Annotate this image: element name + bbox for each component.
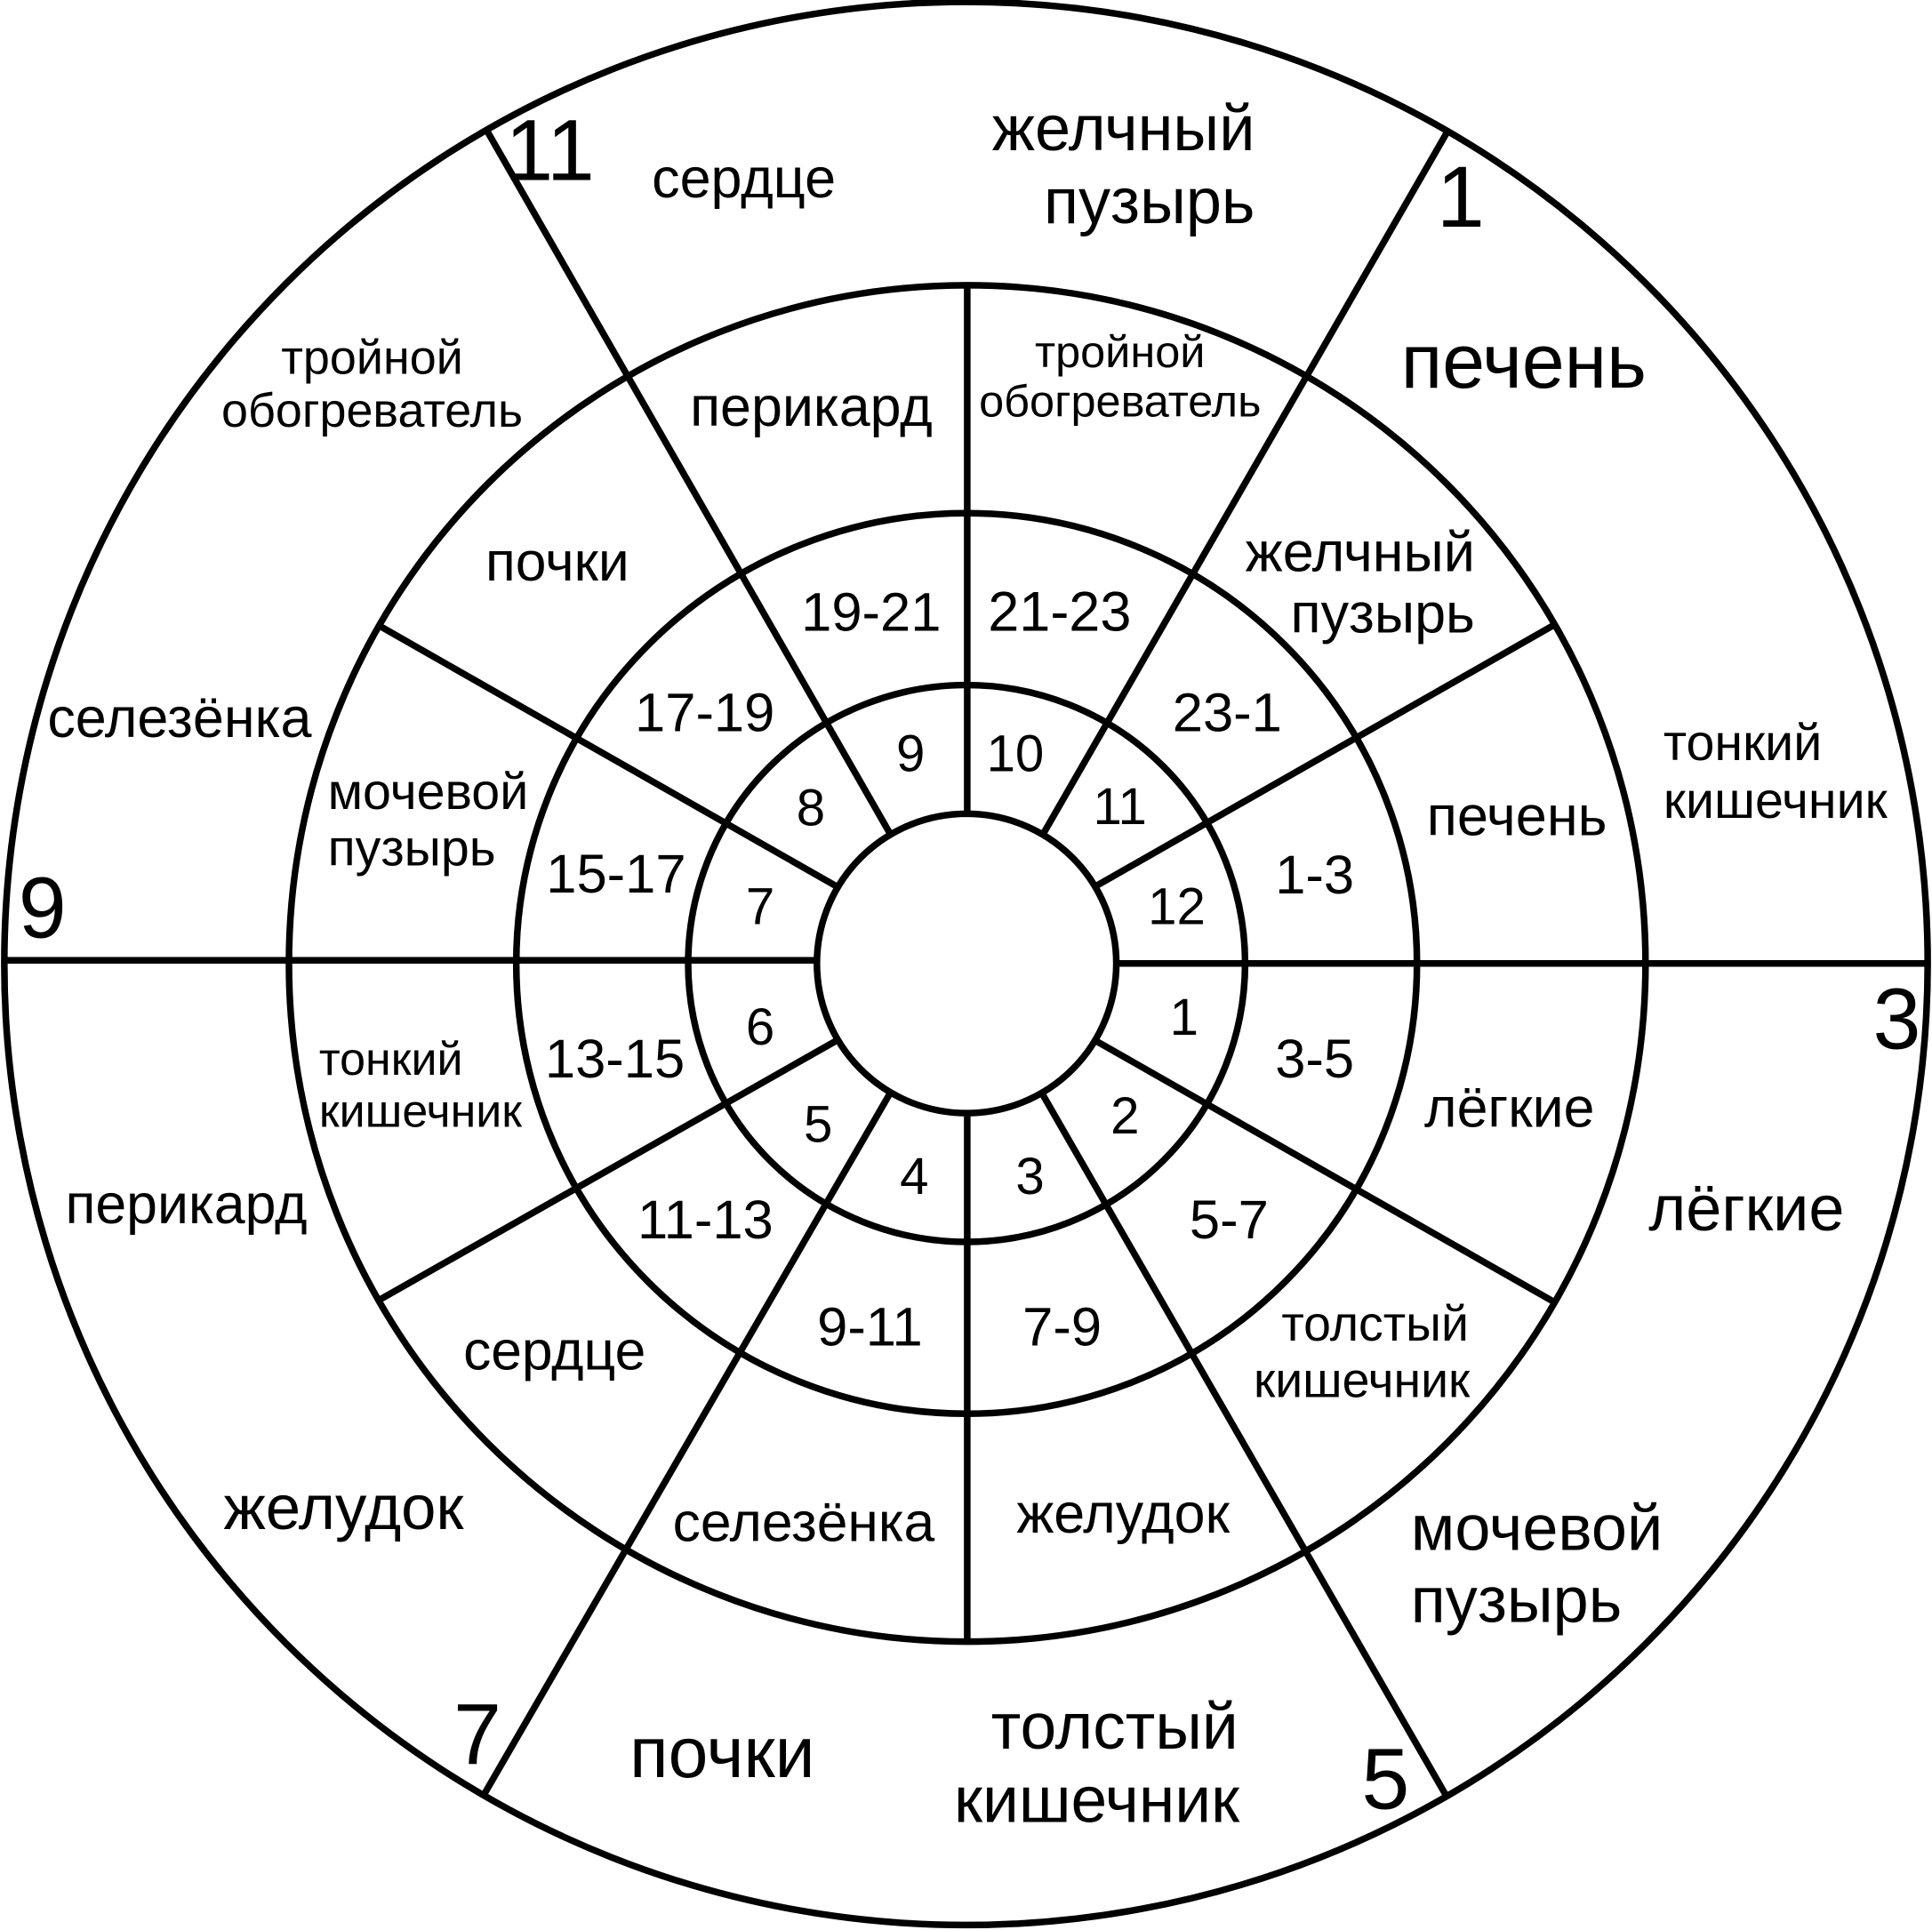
мочевой пузырь inner: пузырь [328,821,496,877]
тонкий кишечник outer: кишечник [1663,773,1888,829]
outer hour numbers: 1 [1437,148,1485,245]
желудок outer: желудок [224,1472,464,1542]
селезёнка inner: селезёнка [673,1493,935,1554]
outer hour numbers: 3 [1872,970,1920,1067]
inner ring numbers: 12 [1148,877,1206,935]
time ranges: 23-1 [1173,683,1282,744]
time ranges: 19-21 [801,582,941,644]
inner ring numbers [746,725,1206,1205]
time ranges: 15-17 [546,844,686,905]
second ring organs [319,326,1607,1554]
inner ring numbers: 8 [797,780,825,837]
мочевой пузырь inner: мочевой [328,764,528,821]
outer hour numbers: 9 [19,860,67,957]
time ranges: 3-5 [1275,1029,1354,1090]
печень inner: печень [1427,786,1607,848]
time ranges: 17-19 [635,683,774,744]
перикард outer: перикард [65,1173,308,1236]
outer hour numbers: 5 [1361,1730,1409,1827]
желчный пузырь outer: желчный [992,93,1255,164]
почки outer: почки [629,1713,815,1793]
желчный пузырь outer: пузырь [1044,166,1255,237]
толстый кишечник outer: толстый [991,1690,1239,1763]
мочевой пузырь outer: мочевой [1411,1493,1663,1564]
сердце outer: сердце [652,148,836,210]
желчный пузырь inner: пузырь [1291,583,1475,645]
тройной обогреватель outer: обогреватель [221,384,523,437]
лёгкие outer: лёгкие [1648,1173,1844,1245]
inner ring numbers: 3 [1015,1148,1045,1205]
time ranges: 1-3 [1275,845,1354,906]
time ranges [545,581,1354,1357]
time ranges: 13-15 [545,1029,685,1090]
time ranges: 7-9 [1022,1296,1102,1357]
outer hour numbers: 11 [505,101,595,198]
inner ring numbers: 5 [804,1096,832,1154]
почки inner: почки [485,532,629,593]
time ranges: 5-7 [1190,1189,1269,1251]
time ranges: 21-23 [988,581,1131,644]
тройной обогреватель inner: тройной [1035,326,1205,377]
inner ring numbers: 2 [1110,1087,1139,1145]
inner ring numbers: 11 [1094,778,1147,836]
желудок inner: желудок [1016,1483,1231,1545]
inner ring numbers: 9 [896,725,925,783]
outer hour numbers: 7 [453,1686,501,1783]
time ranges: 9-11 [817,1296,923,1357]
тонкий кишечник inner: тонкий [319,1034,463,1085]
inner ring numbers: 7 [746,877,774,935]
inner ring numbers: 6 [746,998,774,1056]
толстый кишечник inner: кишечник [1254,1353,1471,1408]
тонкий кишечник outer: тонкий [1663,715,1822,772]
толстый кишечник inner: толстый [1281,1296,1469,1351]
тонкий кишечник inner: кишечник [319,1085,522,1137]
мочевой пузырь outer: пузырь [1411,1566,1622,1637]
inner ring numbers: 1 [1170,989,1198,1046]
перикард inner: перикард [690,376,933,438]
time ranges: 11-13 [637,1189,774,1251]
желчный пузырь inner: желчный [1246,521,1475,583]
inner ring numbers: 4 [900,1148,928,1205]
лёгкие inner: лёгкие [1424,1077,1594,1139]
тройной обогреватель outer: тройной [281,332,463,385]
сердце inner: сердце [463,1320,645,1381]
селезёнка outer: селезёнка [47,687,311,749]
печень outer: печень [1401,319,1647,404]
inner ring numbers: 10 [987,725,1044,783]
тройной обогреватель inner: обогреватель [979,375,1261,426]
толстый кишечник outer: кишечник [954,1764,1240,1837]
